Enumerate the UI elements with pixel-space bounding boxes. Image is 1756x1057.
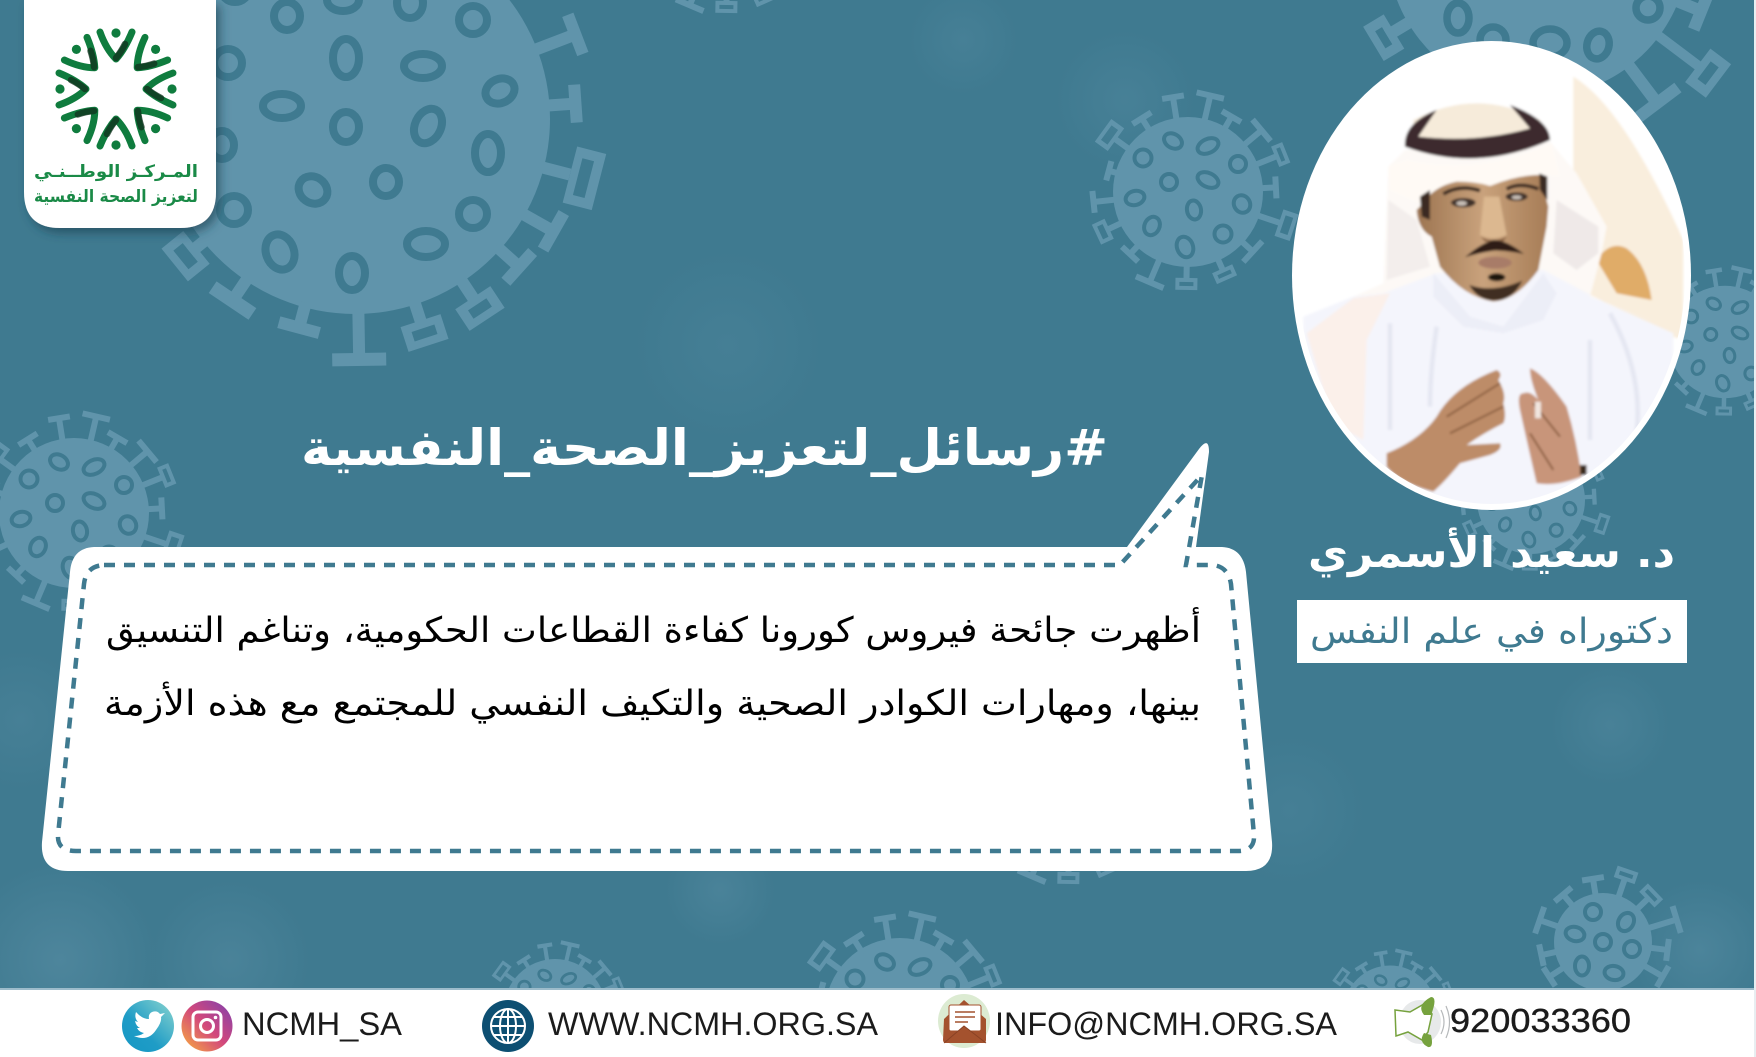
icon: envelope bbox=[938, 994, 990, 1048]
virus below bubble bbox=[971, 683, 1181, 885]
icon: phone bbox=[1395, 997, 1450, 1047]
virus bottom 3 bbox=[1329, 948, 1459, 1045]
email: INFO@NCMH.ORG.SA bbox=[995, 1006, 1338, 1042]
logo name line one: المـركـز الوطــنـي bbox=[34, 162, 198, 182]
icon: globe bbox=[482, 1000, 534, 1052]
virus left of bubble bbox=[0, 410, 185, 612]
large virus top left bbox=[119, 0, 606, 366]
social handle: NCMH_SA bbox=[242, 1006, 403, 1042]
icon: twitter bbox=[122, 1000, 174, 1052]
doctor title label: دكتوراه في علم النفس bbox=[1310, 612, 1673, 652]
virus top right behind photo bbox=[1363, 0, 1731, 124]
virus right edge bbox=[1651, 265, 1756, 416]
website: WWW.NCMH.ORG.SA bbox=[548, 1006, 879, 1042]
virus bottom 2 bbox=[801, 910, 1011, 1057]
virus behind name bbox=[1460, 426, 1611, 571]
virus centre right bbox=[1089, 89, 1299, 291]
bubble text line one: أظهرت جائحة فيروس كورونا كفاءة القطاعات الحكومية، وتناغم التنسيق bbox=[106, 607, 1201, 651]
icon: instagram bbox=[182, 1000, 232, 1052]
hashtag heading: #رسائل_لتعزيز_الصحة_النفسية bbox=[301, 419, 1108, 478]
virus top centre bbox=[629, 0, 839, 14]
logo name line two: لتعزيز الصحة النفسية bbox=[34, 187, 198, 207]
portrait photo bbox=[1290, 40, 1694, 515]
bubble text line two: بينها، ومهارات الكوادر الصحية والتكيف النفسي للمجتمع مع هذه الأزمة bbox=[104, 681, 1201, 724]
logo card bbox=[24, 0, 216, 228]
doctor title label bbox=[1297, 600, 1687, 663]
logo emblem bbox=[55, 28, 177, 150]
phone number: 920033360 bbox=[1450, 1002, 1631, 1039]
virus bottom 1 bbox=[488, 940, 630, 1046]
virus bottom 4 bbox=[1532, 866, 1684, 991]
doctor name: د. سعيد الأسمري bbox=[1308, 527, 1675, 578]
speech bubble bbox=[42, 443, 1272, 871]
